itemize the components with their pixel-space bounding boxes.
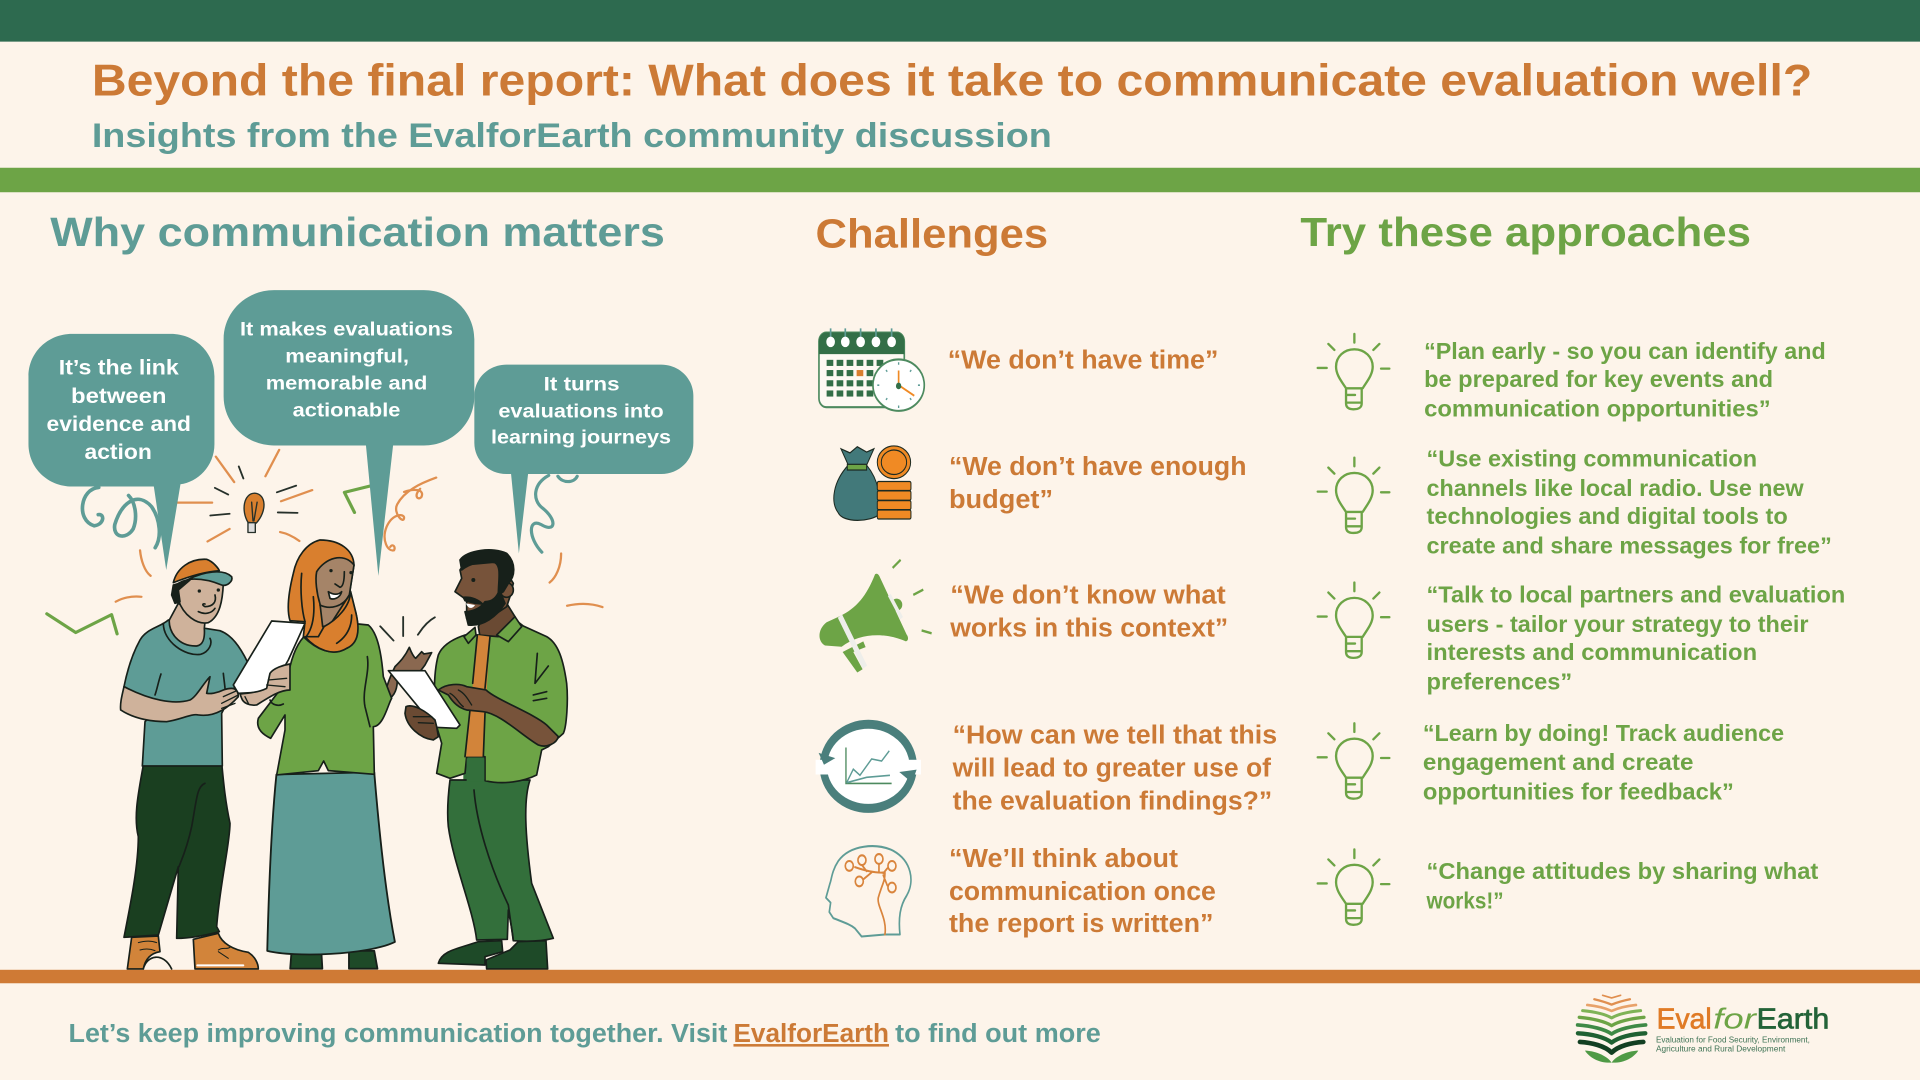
text: after report is written: communication once [949, 876, 1216, 906]
text: plan early: be prepared for key events and [1424, 366, 1773, 392]
person: man in cap, torso and head [121, 559, 247, 766]
text: talk to local partners: users - tailor your strategy to their [1427, 611, 1809, 637]
logo wordmark: Eval [1657, 1003, 1712, 1035]
green divider band [0, 168, 1920, 192]
icon: cycle chart [816, 724, 921, 808]
logo strapline: Agriculture and Rural Development [1656, 1043, 1786, 1053]
logo strapline: Evaluation for Food Security, Environment, [1656, 1035, 1810, 1045]
icon: light bulb 2 [1318, 458, 1389, 533]
logo mark [1578, 995, 1646, 1063]
text: not enough budget: “We don’t have enough [949, 451, 1247, 481]
text: greater use: the evaluation findings?” [953, 785, 1272, 815]
footer call to action [69, 1020, 1101, 1048]
text: plan early [1424, 338, 1826, 421]
icon: light bulb 3 [1318, 583, 1389, 658]
illustration: three people talking with speech bubbles [28, 290, 693, 969]
text: learn by doing: opportunities for feedback” [1423, 779, 1734, 805]
footer call to action: to find out more [895, 1020, 1101, 1048]
subtitle: Insights from the EvalforEarth community discussion [92, 117, 1052, 155]
text: not known what works: works in this context” [949, 613, 1228, 643]
text: change attitudes: “Change attitudes by sharing what [1427, 858, 1819, 884]
heading: why communication matters: Why communication matters [50, 209, 665, 255]
speech bubble text: left: between [71, 385, 167, 408]
text: after report is written [949, 843, 1216, 938]
icon: calendar and clock [819, 328, 924, 411]
text: learn by doing [1423, 720, 1784, 805]
speech bubble text: left [47, 357, 191, 464]
text: talk to local partners: “Talk to local partners and evaluation [1427, 581, 1845, 607]
speech bubble text: middle: meaningful, [285, 345, 409, 367]
top dark green band [0, 0, 1920, 42]
text: talk to local partners: interests and communication [1427, 639, 1757, 665]
text: not known what works: “We don’t know what [950, 580, 1226, 610]
text: change attitudes: works!” [1426, 888, 1504, 914]
icon: light bulb 5 [1318, 849, 1389, 925]
icon: megaphone [819, 560, 932, 672]
text: use existing channels: channels like local radio. Use new [1427, 475, 1804, 501]
text: use existing channels [1427, 446, 1832, 558]
decorative squiggles and idea bulb [47, 450, 602, 641]
heading: challenges: Challenges [816, 210, 1048, 256]
text: use existing channels: “Use existing communication [1427, 446, 1757, 472]
speech bubble text: left: evidence and [47, 413, 191, 436]
text: greater use: “How can we tell that this [953, 719, 1277, 749]
icon: money bag and coins [834, 446, 911, 520]
text: after report is written: the report is written” [949, 908, 1213, 938]
speech bubble text: middle: memorable and [266, 372, 427, 394]
text: plan early: “Plan early - so you can identify and [1424, 338, 1826, 364]
logo strapline [1656, 1035, 1810, 1053]
speech bubble text: left: It’s the link [59, 357, 179, 380]
heading: try these approaches: Try these approaches [1300, 209, 1751, 255]
person: man in cap, legs and shoes [124, 763, 258, 969]
icon: head with network brain [826, 846, 911, 937]
speech bubble text: right [491, 374, 671, 448]
person: man in green overshirt, legs and shoes [438, 753, 553, 969]
text: plan early: communication opportunities” [1424, 395, 1771, 421]
speech bubble text: right: It turns [544, 374, 620, 396]
text: use existing channels: technologies and digital tools to [1427, 503, 1788, 529]
text: talk to local partners [1427, 581, 1845, 694]
text: greater use [952, 719, 1277, 815]
speech bubble text: middle: actionable [293, 399, 401, 421]
text: talk to local partners: preferences” [1427, 668, 1572, 694]
text: no time: “We don’t have time” [948, 345, 1218, 375]
icon: light bulb 1 [1318, 334, 1389, 409]
speech bubble text: middle [240, 319, 453, 421]
text: use existing channels: create and share messages for free” [1427, 532, 1832, 558]
text: not enough budget: budget” [949, 484, 1053, 514]
footer call to action: Let’s keep improving communication together. Visit [69, 1020, 728, 1048]
text: learn by doing: engagement and create [1423, 749, 1693, 775]
text: change attitudes [1426, 858, 1819, 914]
person: woman, top, headscarf and face [258, 540, 432, 775]
speech bubble text: left: action [84, 441, 152, 464]
logo wordmark: for [1713, 1003, 1758, 1035]
speech bubble text: middle: It makes evaluations [240, 319, 453, 341]
logo wordmark: Earth [1757, 1003, 1829, 1035]
speech bubble text: right: learning journeys [491, 426, 671, 448]
speech bubble text: right: evaluations into [498, 401, 664, 423]
paper sheet and man's other hand [233, 621, 305, 705]
header: title and subtitle [92, 57, 1812, 155]
person: man in green overshirt, torso and head [388, 550, 567, 783]
text: not known what works [949, 580, 1228, 643]
logo: EvalforEarth [1578, 995, 1829, 1063]
icon: light bulb 4 [1318, 723, 1389, 799]
orange footer band [0, 970, 1920, 983]
speech bubble shapes [28, 290, 693, 576]
person: woman, skirt and feet [267, 772, 395, 969]
text: learn by doing: “Learn by doing! Track audience [1423, 720, 1784, 746]
footer call to action: EvalforEarth [733, 1020, 889, 1048]
title: Beyond the final report: What does it take to communicate evaluation well? [92, 57, 1812, 106]
text: after report is written: “We’ll think about [949, 843, 1178, 873]
logo wordmark [1657, 1003, 1829, 1035]
text: not enough budget [949, 451, 1247, 514]
text: greater use: will lead to greater use of [952, 752, 1271, 782]
